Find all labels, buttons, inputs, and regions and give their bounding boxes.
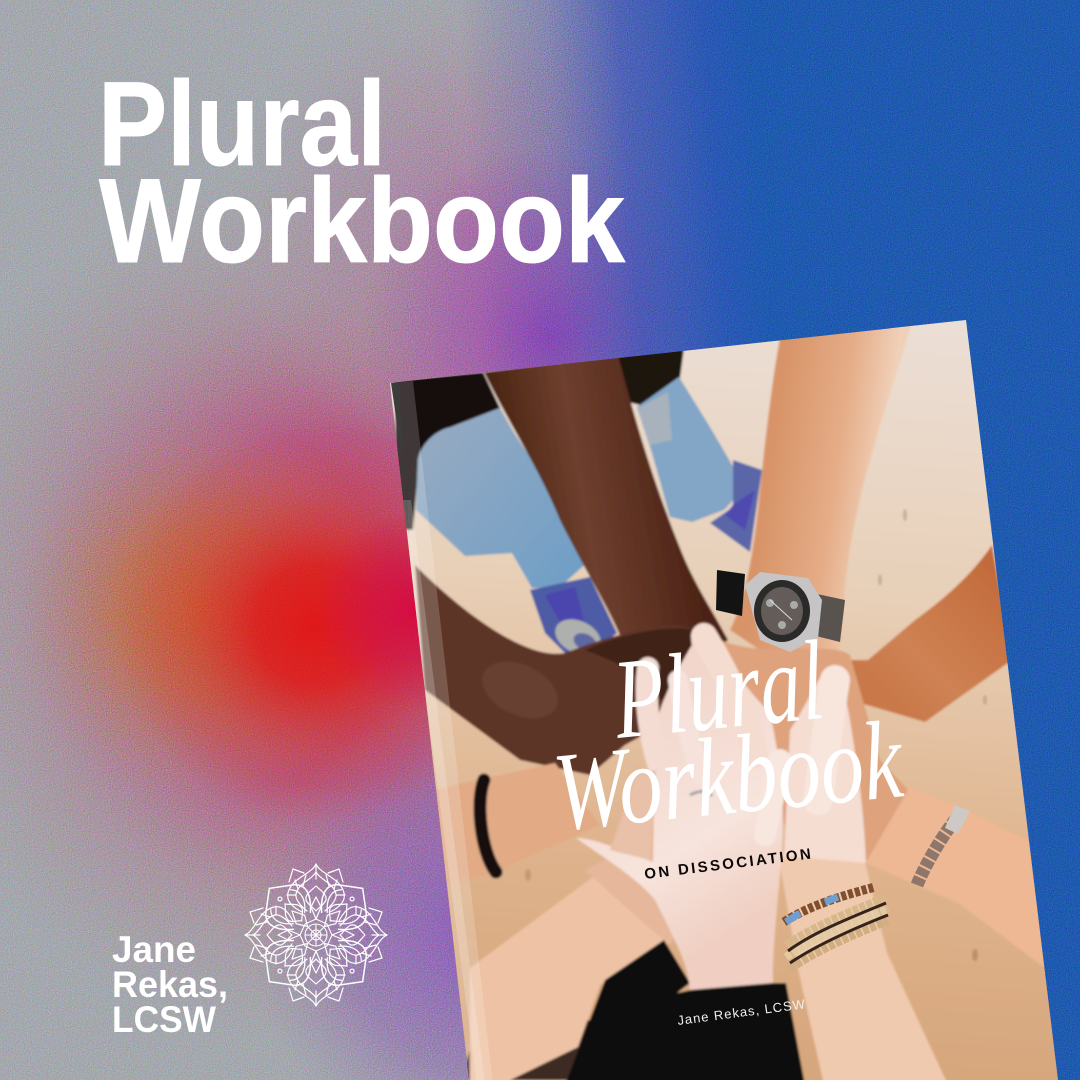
title: Plural xyxy=(98,57,386,191)
cover heading xyxy=(556,639,904,830)
panel: book cover xyxy=(380,310,1080,1080)
author name: LCSW xyxy=(112,999,216,1040)
title xyxy=(98,57,625,288)
cover photo: hands stacked together xyxy=(380,310,1080,1080)
cover subtitle: ON DISSOCIATION xyxy=(643,845,814,883)
cover author: Jane Rekas, LCSW xyxy=(676,996,807,1028)
author name: Rekas, xyxy=(112,964,228,1005)
cover heading: Plural xyxy=(607,617,829,763)
spine gloss strips xyxy=(390,381,493,1080)
author name: Jane xyxy=(112,929,196,970)
beaded bracelets xyxy=(784,887,888,969)
author name xyxy=(112,929,228,1040)
silver bracelet xyxy=(917,805,970,885)
cover heading: Workbook xyxy=(548,697,909,854)
wristwatch xyxy=(716,570,845,652)
title: Workbook xyxy=(99,154,625,288)
icon: mandala logo xyxy=(245,864,387,1006)
